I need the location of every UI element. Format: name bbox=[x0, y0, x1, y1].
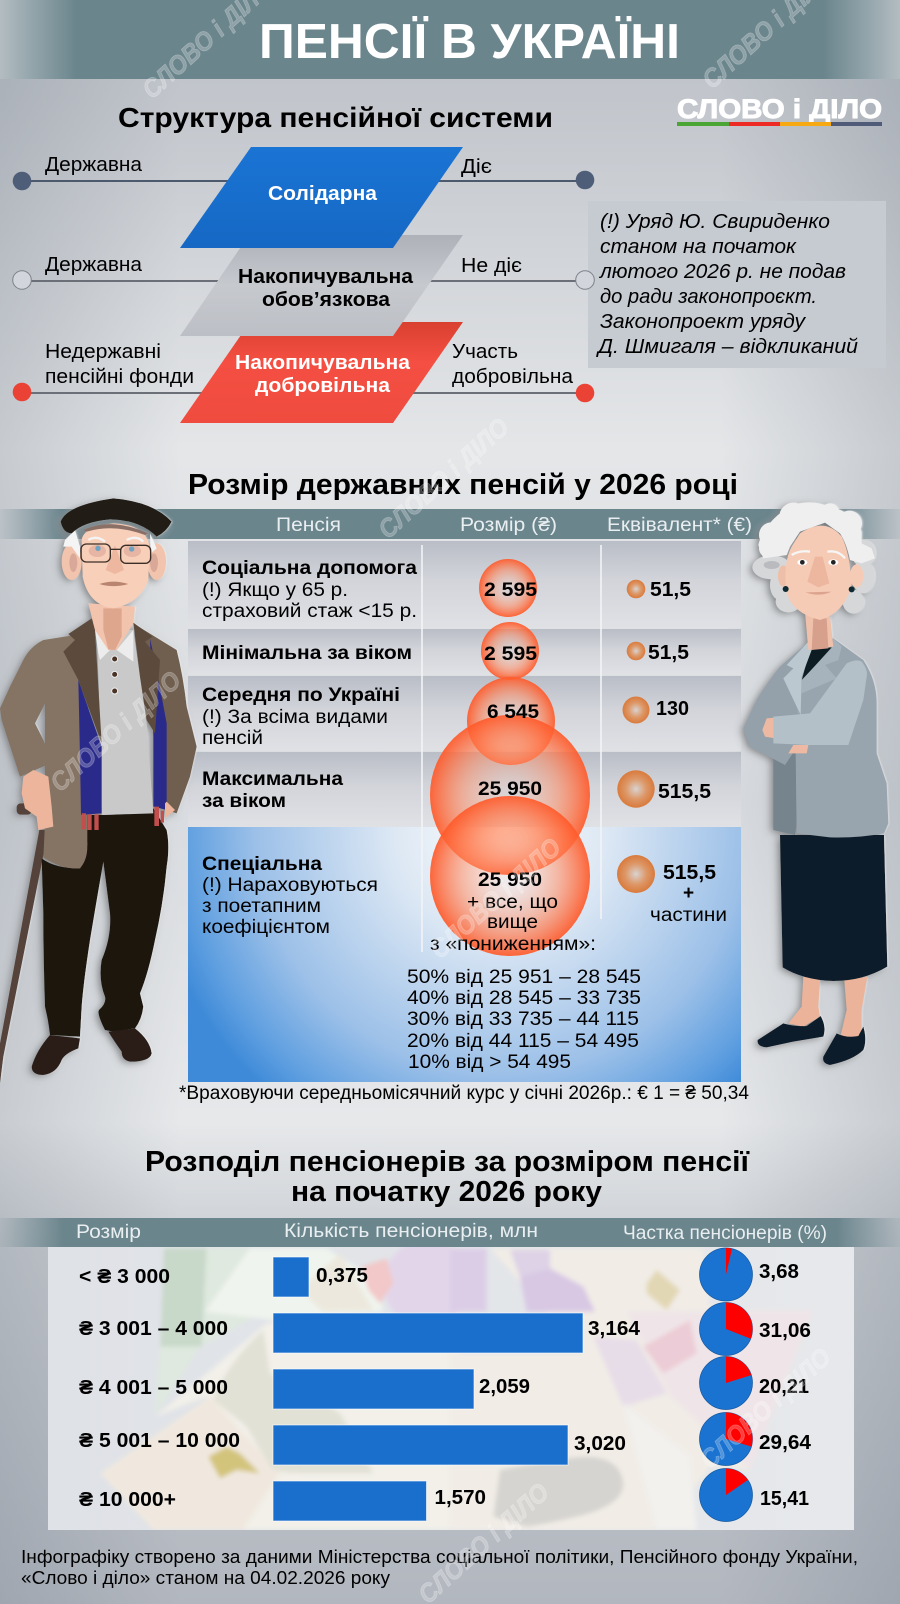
hryvnia amounts: з «пониженням»: bbox=[430, 934, 596, 955]
source note: «Слово і діло» станом на 04.02.2026 року bbox=[21, 1568, 390, 1588]
callout: note about the bill bbox=[588, 201, 886, 368]
callout: note about the bill: станом на початок bbox=[600, 236, 798, 258]
heading: distribution of pensioners: на початку 2026 року bbox=[291, 1176, 602, 1208]
size range labels: ₴ 5 001 – 10 000 bbox=[79, 1430, 240, 1452]
reduction coefficient list: 30% від 33 735 – 44 115 bbox=[407, 1009, 639, 1030]
callout: note about the bill: Законопроект уряду bbox=[600, 311, 806, 333]
side labels: пенсійні фонди bbox=[45, 366, 194, 388]
tier: voluntary funded: добровільна bbox=[255, 375, 391, 397]
table header band: Пенсія bbox=[276, 515, 341, 536]
hryvnia amounts bbox=[430, 580, 596, 955]
euro amounts: 515,5 bbox=[658, 781, 711, 803]
footnote: exchange rate: *Враховуючи середньомісячний курс у січні 2026р.: € 1 = ₴ 50,34 bbox=[179, 1083, 749, 1104]
side labels bbox=[45, 154, 574, 388]
euro amounts: + bbox=[683, 883, 694, 904]
table header band: distribution bbox=[0, 1218, 900, 1247]
pie charts: share of pensioners: 31,06 bbox=[759, 1320, 811, 1342]
side labels: Діє bbox=[461, 156, 492, 178]
bar chart: number of pensioners: 3,164 bbox=[588, 1318, 641, 1340]
panel: pensions table bbox=[188, 541, 741, 1082]
bar chart: number of pensioners: 1,570 bbox=[434, 1487, 486, 1509]
row labels: страховий стаж <15 р. bbox=[202, 601, 417, 622]
row labels: (!) За всіма видами bbox=[202, 707, 388, 728]
hryvnia amounts: 2 595 bbox=[484, 580, 537, 601]
table header band: Еквівалент* (€) bbox=[607, 515, 752, 536]
dots row 3 bbox=[13, 383, 594, 402]
row labels: (!) Нараховуються bbox=[202, 875, 378, 896]
tier: solidarity bbox=[180, 147, 463, 248]
header band with title: ПЕНСІЇ В УКРАЇНІ bbox=[259, 15, 680, 69]
heading: state pensions size: Розмір державних пенсій у 2026 році bbox=[188, 469, 738, 501]
euro amounts bbox=[648, 579, 727, 926]
callout: note about the bill: до ради законопроєкт. bbox=[600, 286, 817, 308]
panel: distribution chart background of banknotes bbox=[48, 1240, 854, 1530]
heading: distribution of pensioners bbox=[145, 1146, 750, 1208]
watermarks: СЛОВО і ДІЛО bbox=[372, 412, 515, 544]
table header band: distribution: Розмір bbox=[76, 1222, 141, 1243]
row labels: коефіцієнтом bbox=[202, 917, 330, 938]
pie charts: share of pensioners: 15,41 bbox=[760, 1488, 809, 1510]
hryvnia amounts: 25 950 bbox=[478, 779, 542, 800]
table header band: distribution: Кількість пенсіонерів, млн bbox=[284, 1221, 538, 1242]
illustration: elderly man with cane bbox=[0, 498, 197, 1083]
callout: note about the bill: (!) Уряд Ю. Свириденко bbox=[600, 211, 830, 233]
connector lines bbox=[22, 181, 585, 393]
row backgrounds bbox=[188, 541, 741, 1082]
bar chart: number of pensioners: 2,059 bbox=[479, 1376, 530, 1398]
hryvnia amounts: 2 595 bbox=[484, 644, 537, 665]
size range labels: ₴ 10 000+ bbox=[79, 1489, 176, 1511]
bar chart: number of pensioners: 3,020 bbox=[574, 1433, 626, 1455]
side labels: Участь bbox=[452, 341, 518, 363]
row labels: з поетапним bbox=[202, 896, 321, 917]
row labels: Максимальна bbox=[202, 769, 343, 790]
euro amounts: 51,5 bbox=[650, 579, 691, 601]
large amount bubbles bbox=[430, 559, 590, 956]
hryvnia amounts: 25 950 bbox=[478, 870, 542, 891]
pie charts: share of pensioners bbox=[700, 1248, 812, 1522]
logo: Слово і діло: СЛОВО і ДІЛО bbox=[677, 94, 882, 124]
heading: distribution of pensioners: Розподіл пенсіонерів за розміром пенсії bbox=[145, 1146, 750, 1178]
size range labels: < ₴ 3 000 bbox=[79, 1266, 170, 1288]
source note bbox=[21, 1547, 858, 1588]
tier: mandatory funded: обов’язкова bbox=[262, 289, 391, 311]
pie charts: share of pensioners: 29,64 bbox=[759, 1432, 812, 1454]
callout: note about the bill: Д. Шмигаля – відкликаний bbox=[596, 336, 858, 358]
callout: note about the bill: лютого 2026 р. не подав bbox=[599, 261, 846, 283]
row labels: Спеціальна bbox=[202, 854, 322, 875]
euro amounts: 515,5 bbox=[663, 862, 716, 884]
size range labels: ₴ 4 001 – 5 000 bbox=[79, 1377, 228, 1399]
euro amounts: 51,5 bbox=[648, 642, 689, 664]
side labels: Державна bbox=[45, 154, 143, 176]
table header band: distribution: Частка пенсіонерів (%) bbox=[623, 1223, 827, 1244]
source note: Інфографіку створено за даними Міністерства соціальної політики, Пенсійного фонду України, bbox=[21, 1547, 858, 1567]
tier: mandatory funded bbox=[180, 235, 463, 336]
tier: mandatory funded: Накопичувальна bbox=[238, 266, 414, 288]
dots row 2 bbox=[13, 271, 594, 289]
reduction coefficient list: 40% від 28 545 – 33 735 bbox=[407, 988, 641, 1009]
dots row 1 bbox=[13, 171, 594, 190]
tier: voluntary funded bbox=[180, 322, 463, 423]
hryvnia amounts: + все, що bbox=[467, 892, 558, 913]
size range labels: ₴ 3 001 – 4 000 bbox=[79, 1318, 228, 1340]
table header band: Розмір (₴) bbox=[460, 515, 557, 536]
row labels: Мінімальна за віком bbox=[202, 643, 412, 664]
watermarks: СЛОВО і ДІЛО bbox=[694, 1342, 837, 1474]
size range labels bbox=[79, 1266, 240, 1511]
row labels: за віком bbox=[202, 791, 286, 812]
euro amounts: частини bbox=[650, 905, 727, 926]
tier: voluntary funded: Накопичувальна bbox=[235, 352, 411, 374]
column dividers bbox=[422, 545, 601, 952]
small euro bubbles bbox=[617, 580, 655, 893]
watermarks: СЛОВО і ДІЛО bbox=[424, 832, 567, 964]
pie charts: share of pensioners: 3,68 bbox=[759, 1261, 799, 1283]
row labels: (!) Якщо у 65 р. bbox=[202, 580, 348, 601]
heading: pension system structure: Структура пенсійної системи bbox=[118, 102, 553, 133]
panel: pension system diagram bbox=[13, 147, 594, 423]
side labels: добровільна bbox=[452, 366, 574, 388]
hryvnia amounts: вище bbox=[487, 912, 538, 933]
table header band bbox=[0, 509, 900, 539]
row labels: пенсій bbox=[202, 728, 263, 749]
row labels bbox=[202, 558, 417, 938]
header band with title bbox=[0, 0, 900, 79]
bar chart: number of pensioners: 0,375 bbox=[316, 1265, 368, 1287]
side labels: Державна bbox=[45, 254, 143, 276]
illustration: elderly woman bbox=[743, 502, 888, 1065]
reduction coefficient list bbox=[407, 967, 641, 1073]
side labels: Недержавні bbox=[45, 341, 161, 363]
row labels: Соціальна допомога bbox=[202, 558, 417, 579]
side labels: Не діє bbox=[461, 255, 522, 277]
watermarks: СЛОВО і ДІЛО bbox=[44, 665, 187, 797]
row labels: Середня по Україні bbox=[202, 685, 400, 706]
pie charts: share of pensioners: 20,21 bbox=[759, 1376, 809, 1398]
hryvnia amounts: 6 545 bbox=[487, 702, 539, 723]
reduction coefficient list: 20% від 44 115 – 54 495 bbox=[407, 1031, 639, 1052]
bar chart: number of pensioners bbox=[273, 1257, 641, 1521]
tier: solidarity: Солідарна bbox=[268, 183, 378, 205]
euro amounts: 130 bbox=[656, 698, 689, 720]
reduction coefficient list: 50% від 25 951 – 28 545 bbox=[407, 967, 641, 988]
reduction coefficient list: 10% від > 54 495 bbox=[408, 1052, 571, 1073]
